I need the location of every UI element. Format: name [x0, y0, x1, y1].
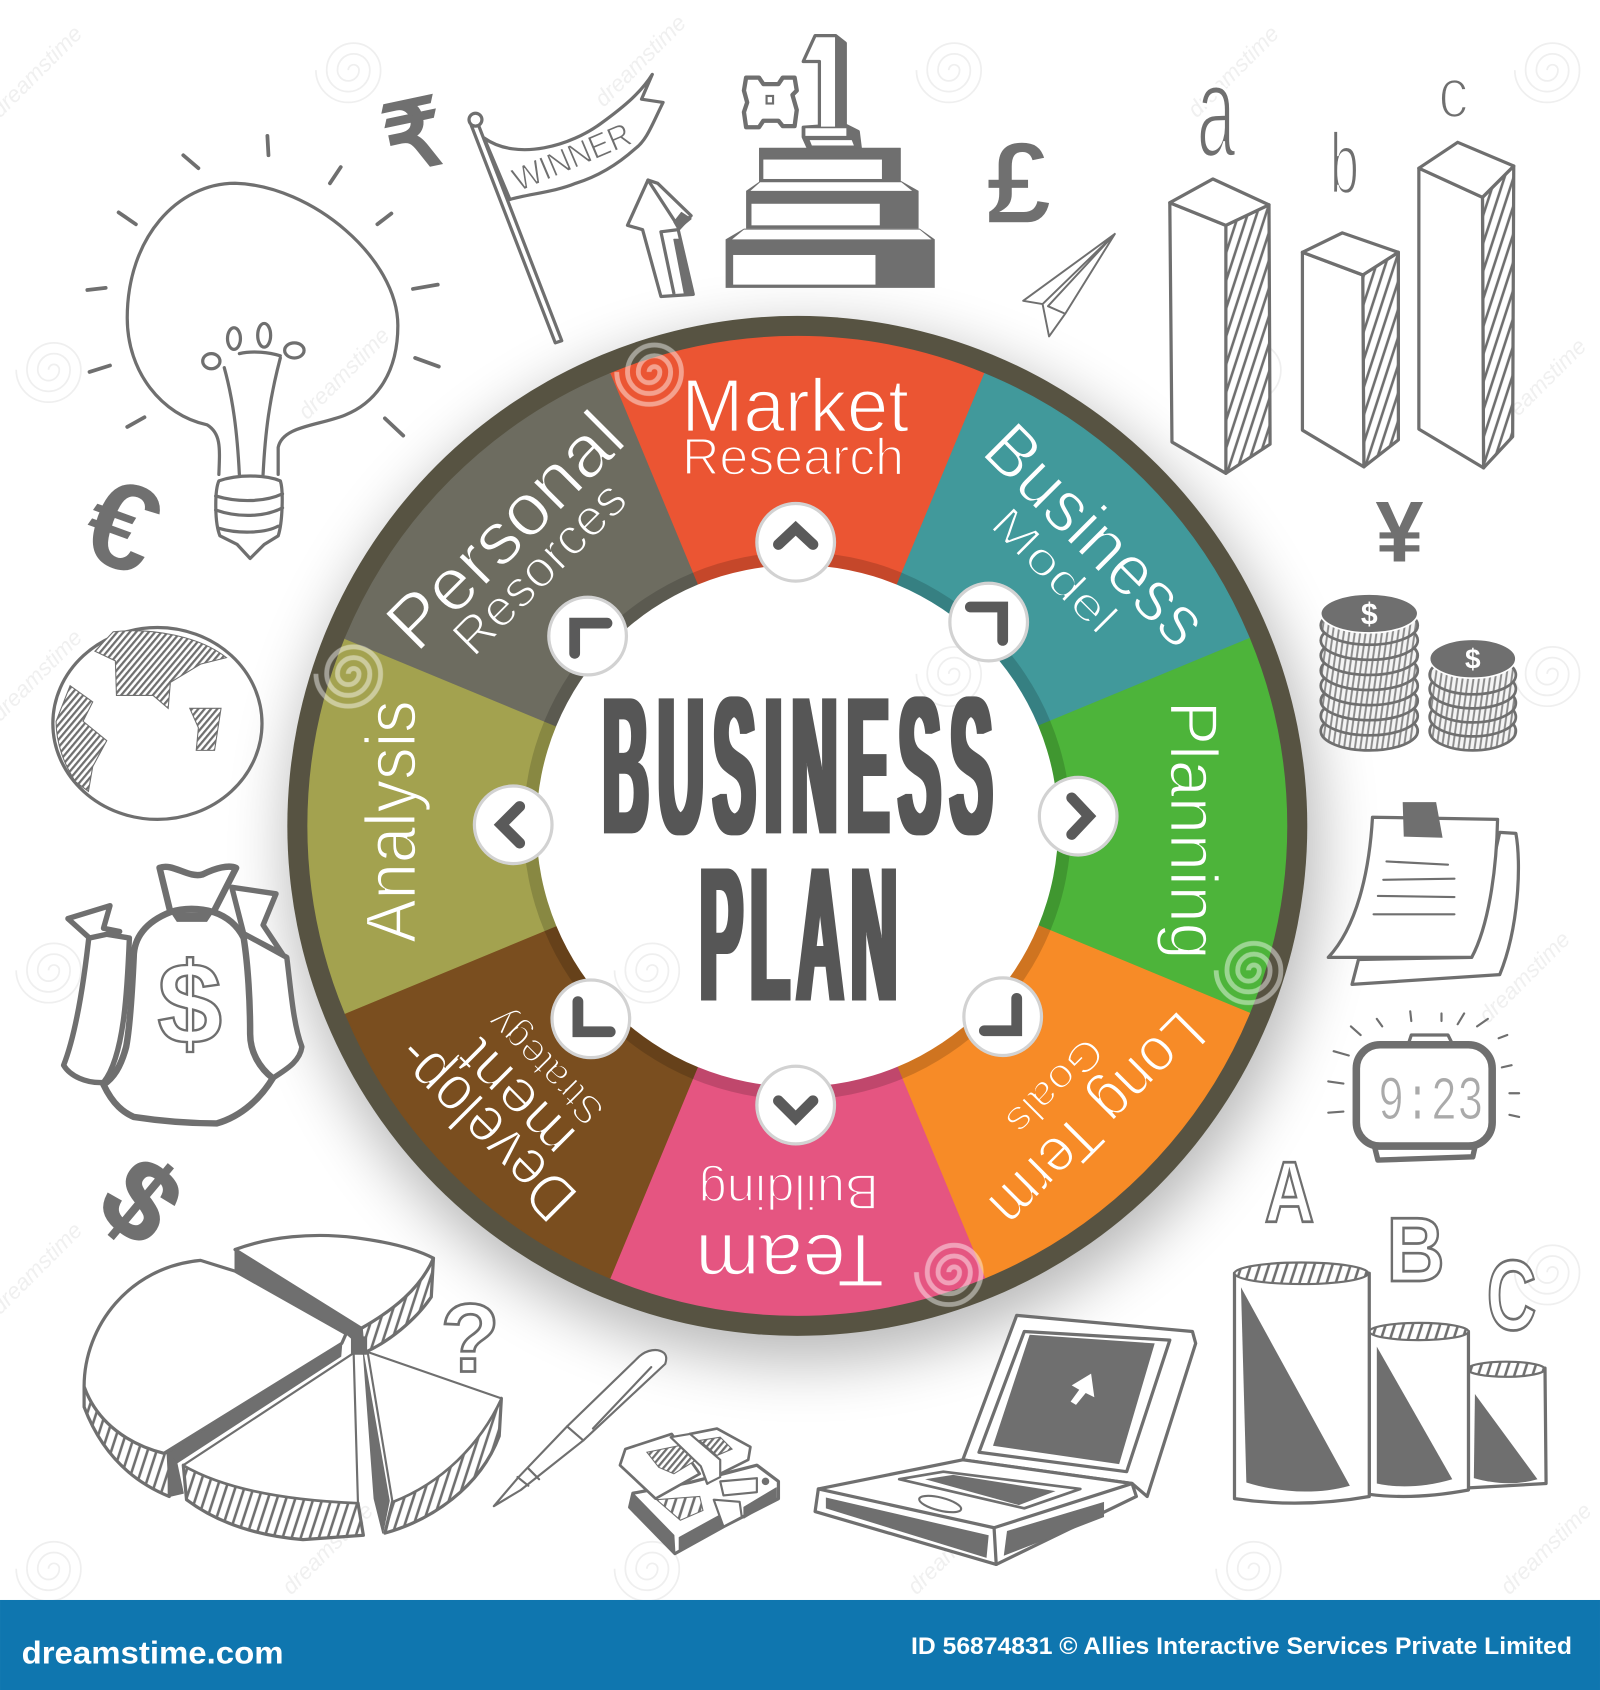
- watermark text: dreamstime: [590, 10, 691, 111]
- segment: business model: [665, 347, 1276, 958]
- coloured watermark spirals: [316, 345, 1281, 1305]
- title: business plan: [603, 655, 1002, 1042]
- watermark text: dreamstime: [1183, 21, 1284, 122]
- segment: development strategy: Develop-: [377, 1023, 591, 1237]
- icon: fountain pen: [494, 1350, 666, 1506]
- chart: 3D bars a b c: b: [1330, 116, 1359, 212]
- chart: 3D pie: [84, 1235, 501, 1540]
- button: upper right chevron: [950, 583, 1027, 661]
- chart: cylinders A B C: A: [1265, 1145, 1314, 1241]
- text: PLAN: [700, 827, 905, 1042]
- brand name: dreamstime.com: [22, 1636, 284, 1671]
- chart: 3D bars a b c: [1170, 37, 1514, 473]
- segment: analysis: Analysis: [353, 700, 432, 943]
- segment: market research: Research: [682, 427, 904, 485]
- icon: winner flag: WINNER: [507, 116, 637, 199]
- segment: development strategy: [319, 693, 930, 1304]
- segment: personal resources: Personal: [370, 395, 640, 666]
- wheel drop shadow: [288, 331, 1319, 1362]
- icon: up arrow: [627, 180, 693, 296]
- button: right chevron: [1039, 777, 1117, 855]
- icon: laptop: [815, 1315, 1196, 1564]
- icon: globe: [53, 627, 262, 819]
- icon: question mark: ?: [440, 1283, 500, 1392]
- chart: cylinders A B C: B: [1387, 1200, 1445, 1301]
- segment: development strategy: Strategy: [479, 1000, 613, 1134]
- icon: money bags: [64, 867, 302, 1123]
- outer ring: [287, 316, 1307, 1336]
- icon: rupee symbol: ₹: [374, 77, 454, 195]
- image credit: ID 56874831 © Allies Interactive Services Private Limited: [911, 1634, 1572, 1660]
- icon: euro symbol: €: [66, 448, 179, 603]
- segment: personal resources: [319, 347, 930, 958]
- icon: yen symbol: ¥: [1375, 485, 1423, 581]
- watermark text: dreamstime: [1490, 334, 1591, 435]
- segment: business model: Model: [981, 497, 1128, 643]
- watermark text: dreamstime: [902, 1498, 1004, 1599]
- circular diagram: business plan wheel: [287, 316, 1307, 1336]
- segment: team building: Building: [699, 1164, 879, 1220]
- segment: development strategy: ment: [441, 1025, 588, 1173]
- chart: 3D bars a b c: c: [1438, 55, 1468, 134]
- icon: money bundles: [620, 1429, 778, 1554]
- segment: long term goals: [665, 693, 1276, 1304]
- icon: coin stacks: $: [1361, 598, 1378, 631]
- segment: team building: Team: [695, 1218, 884, 1302]
- icon: money bags: $: [157, 939, 222, 1069]
- icon: coin stacks: [1321, 594, 1516, 750]
- segment: analysis: [308, 639, 797, 1013]
- button: up chevron: [757, 503, 835, 581]
- watermark text: dreamstime: [293, 323, 394, 424]
- button: lower right chevron: [964, 978, 1042, 1056]
- button: left chevron: [474, 786, 552, 864]
- inner shadow band: [523, 552, 1071, 1100]
- icon: light bulb: [87, 136, 439, 558]
- icon: sticky notes: [1328, 802, 1518, 984]
- footer banner: [0, 1600, 1600, 1690]
- segment: market research: Market: [681, 363, 909, 447]
- icon: number one trophy steps: [726, 36, 935, 288]
- center white disc: [536, 565, 1058, 1087]
- icon: paper plane: [1023, 234, 1115, 336]
- button: down chevron: [757, 1066, 835, 1144]
- watermark text: dreamstime: [277, 1498, 378, 1599]
- center disc watermark spirals: [615, 647, 981, 1003]
- watermark text: dreamstime: [1495, 1498, 1597, 1599]
- icon: winner flag: [469, 74, 663, 343]
- watermark text: dreamstime: [1474, 927, 1575, 1028]
- segment: long term goals: Goals: [997, 1028, 1113, 1145]
- button: lower left chevron: [552, 980, 630, 1058]
- icon: pound symbol: £: [986, 118, 1051, 248]
- button: upper left chevron: [549, 597, 626, 675]
- chart: cylinders A B C: C: [1487, 1240, 1536, 1351]
- icon: coin stacks: $: [1465, 643, 1481, 674]
- icon: digital alarm clock: [1328, 1011, 1519, 1160]
- segment: market research: [610, 336, 985, 826]
- segment: planning: [797, 639, 1287, 1013]
- icon: digital alarm clock: 9:23: [1378, 1067, 1484, 1138]
- segment: team building: [610, 826, 985, 1315]
- segment: business model: Business: [968, 408, 1223, 663]
- chart: cylinders A B C: [1234, 1145, 1546, 1503]
- icon: dollar symbol: $: [77, 1133, 205, 1269]
- chart: 3D bars a b c: a: [1197, 37, 1236, 184]
- segment: long term goals: Long Term: [975, 998, 1219, 1242]
- segment: personal resources: Resorces: [440, 469, 638, 666]
- segment: planning: Planning: [1155, 701, 1230, 960]
